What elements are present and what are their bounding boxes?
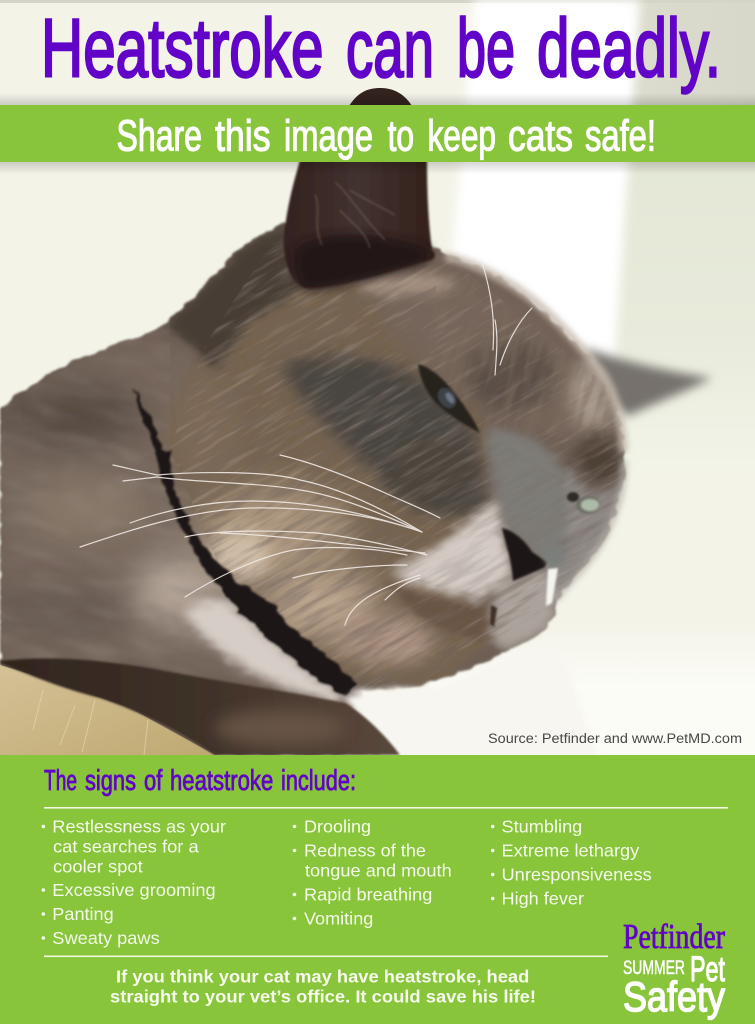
cat photo: near ear [284, 88, 435, 290]
symptoms column 2: Rapid breathing [304, 885, 432, 905]
banner text: safe! [585, 112, 656, 160]
cat photo: body [18, 364, 211, 652]
cat photo: head edge fringe [445, 256, 624, 600]
banner text: image [284, 112, 373, 160]
title [41, 2, 721, 94]
cat photo: fur strands [0, 222, 625, 705]
cat photo: chest and face details [132, 388, 600, 762]
banner text: this [215, 112, 271, 160]
banner text: cats [508, 112, 573, 160]
cat photo: grey eye stripe [280, 356, 490, 516]
symptoms column 1 [42, 817, 226, 948]
cat photo: muzzle fur overlay [397, 502, 510, 596]
banner text [116, 112, 656, 160]
cat photo: forehead [380, 295, 466, 386]
cat photo: mouth fur [388, 584, 490, 640]
logo: Petfinder Summer Pet Safety: Pet [690, 950, 725, 989]
logo: Petfinder Summer Pet Safety: Petfinder [623, 917, 725, 956]
call to action: straight to your vet’s office. It could save his life! [110, 987, 536, 1007]
symptoms column 2: tongue and mouth [305, 861, 452, 881]
symptoms column 1: Sweaty paws [52, 928, 160, 948]
logo: Petfinder Summer Pet Safety: Safety [623, 973, 725, 1020]
call to action: If you think your cat may have heatstroke, head [116, 967, 529, 987]
cat photo: blanket [0, 665, 215, 755]
cat photo: white muzzle [390, 500, 513, 599]
symptoms column 3: High fever [502, 889, 584, 909]
title: can [346, 2, 434, 94]
title: be [457, 2, 515, 94]
symptoms column 1: Panting [52, 904, 114, 924]
symptoms column 1: Restlessness as your [52, 817, 226, 837]
banner text: keep [428, 112, 496, 160]
symptoms column 3: Extreme lethargy [502, 841, 639, 861]
signs heading: The [44, 765, 77, 797]
cat photo: white chest patch [184, 600, 345, 706]
symptoms column 1: cooler spot [53, 856, 143, 876]
symptoms column 1: Excessive grooming [52, 880, 216, 900]
title: Heatstroke [41, 2, 324, 94]
cat photo: neck ridge [165, 222, 300, 370]
cat photo [0, 0, 755, 762]
logo: Petfinder Summer Pet Safety: SUMMER [623, 958, 685, 979]
banner text: Share [116, 112, 202, 160]
cat photo: front paw [0, 658, 400, 755]
green banner [0, 93, 755, 174]
cat photo: nose [490, 528, 564, 627]
signs heading: signs [85, 765, 136, 797]
signs heading: of [144, 765, 163, 797]
symptoms column 2: Redness of the [304, 841, 426, 861]
banner text: to [388, 112, 414, 160]
symptoms column 2 [293, 817, 452, 929]
symptoms column 1: cat searches for a [53, 837, 199, 857]
symptoms column 3: Stumbling [502, 817, 582, 837]
cat photo: base fur colours [0, 222, 626, 755]
signs panel [0, 755, 755, 1024]
logo: Petfinder Summer Pet Safety [623, 917, 725, 1020]
symptoms column 2: Drooling [304, 817, 371, 837]
cat photo: side of face [542, 443, 624, 597]
photo source credit: Source: Petfinder and www.PetMD.com [488, 731, 742, 746]
signs heading [44, 765, 356, 797]
cat photo: neck fur [194, 507, 446, 680]
signs heading: include: [281, 765, 356, 797]
signs heading: heatstroke [170, 765, 273, 797]
symptoms column 3: Unresponsiveness [502, 865, 652, 885]
symptoms column 3 [491, 817, 652, 909]
call to action [110, 967, 536, 1007]
cat photo: far eye [567, 492, 600, 514]
symptoms column 2: Vomiting [304, 909, 373, 929]
cat photo: near eye [418, 364, 480, 433]
cat photo: nose bridge [485, 429, 568, 565]
cat photo: chin [490, 570, 556, 650]
cat photo: collar [132, 388, 358, 697]
cat photo: whiskers [80, 262, 532, 625]
cat photo: far ear [585, 348, 712, 416]
cat photo: white fur under chin [341, 660, 492, 755]
